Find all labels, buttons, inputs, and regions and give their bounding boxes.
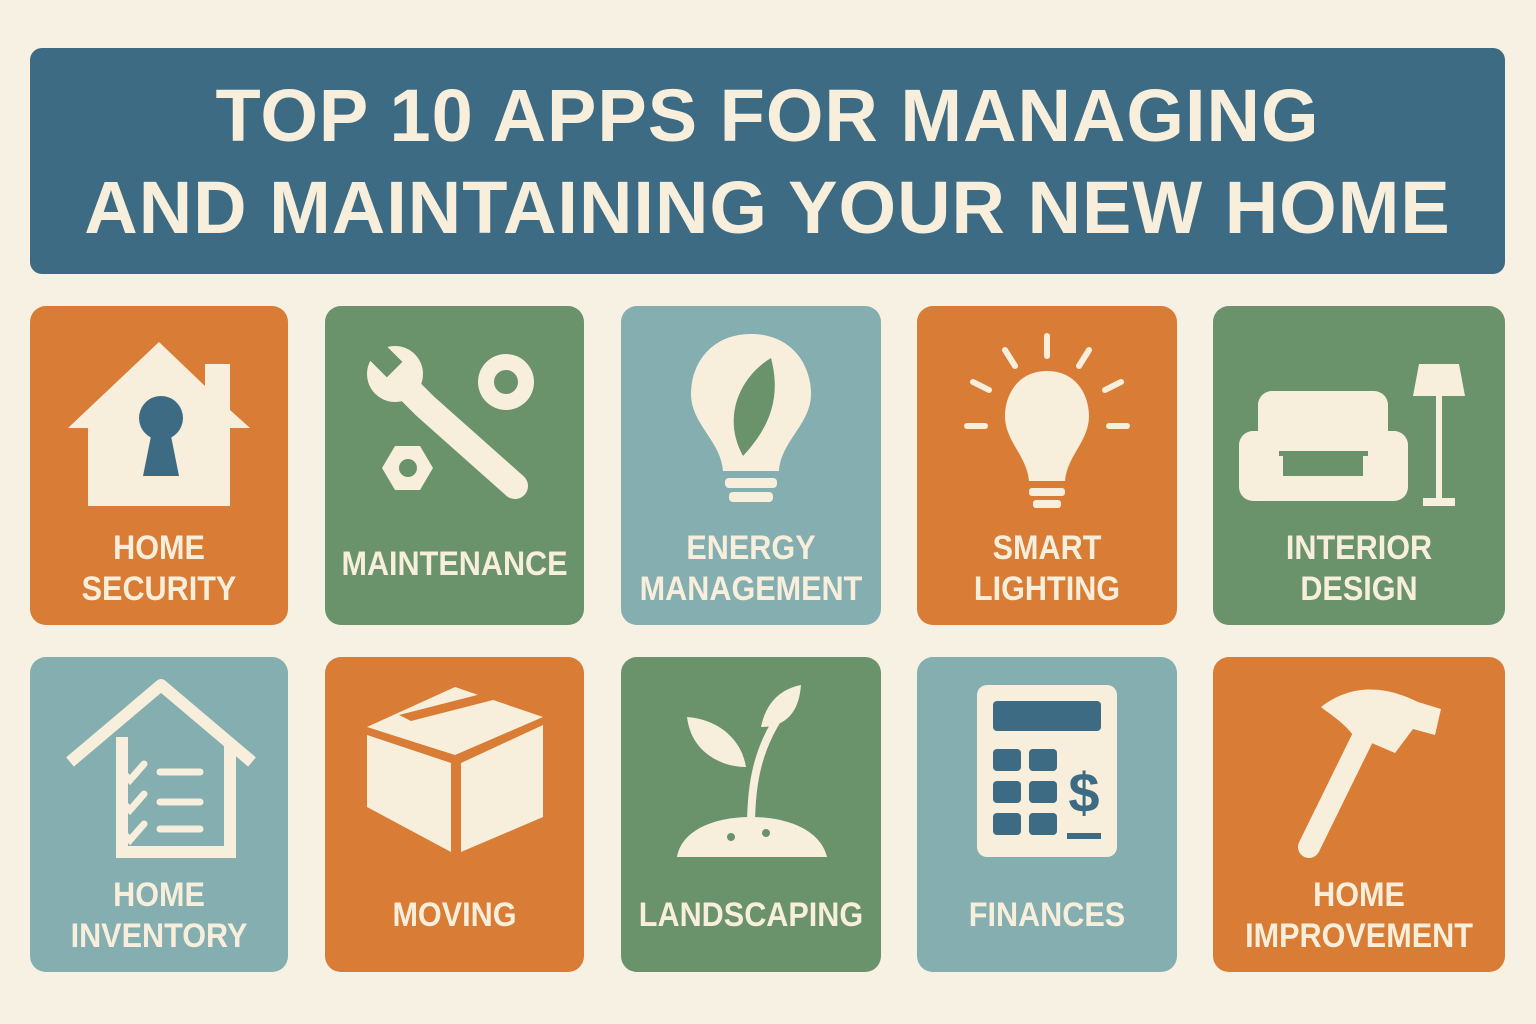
tile: smart lighting: LIGHTING: [974, 570, 1120, 608]
tile: home inventory: HOME: [113, 876, 205, 914]
tile: finances: [917, 657, 1177, 972]
icon: house with keyhole: [68, 342, 250, 506]
tile: home improvement: HOME: [1313, 876, 1405, 914]
title banner: AND MAINTAINING YOUR NEW HOME: [84, 166, 1451, 249]
tile: interior design: [1213, 306, 1505, 625]
tile: interior design: INTERIOR: [1286, 529, 1432, 567]
icon: hammer: [1298, 690, 1441, 858]
tile: home security: [30, 306, 288, 625]
tile: home security: SECURITY: [82, 570, 236, 608]
tile: finances: FINANCES: [969, 896, 1125, 934]
tile: moving: [325, 657, 584, 972]
tile: home inventory: [30, 657, 288, 972]
tile: home security: HOME: [113, 529, 205, 567]
icon: bulb with leaf: [691, 334, 811, 502]
title banner: TOP 10 APPS FOR MANAGING: [215, 74, 1320, 157]
tile: home improvement: IMPROVEMENT: [1245, 917, 1473, 955]
tile: moving: MOVING: [392, 896, 517, 934]
icon: sprout: [677, 685, 827, 857]
icon: calculator: $: [1068, 761, 1100, 824]
tile: energy management: ENERGY: [686, 529, 816, 567]
tile: energy management: [621, 306, 881, 625]
icon: light bulb with rays: [964, 333, 1130, 508]
title banner: [30, 48, 1505, 274]
tile: home inventory: INVENTORY: [71, 917, 247, 955]
tile: landscaping: LANDSCAPING: [639, 896, 863, 934]
icon: wrench and gears: [367, 346, 534, 499]
icon: sofa and lamp: [1239, 364, 1465, 506]
icon: house with checklist: [66, 679, 256, 858]
tile: smart lighting: [917, 306, 1177, 625]
icon: box: [367, 687, 543, 852]
tile: smart lighting: SMART: [993, 529, 1101, 567]
tile: home improvement: [1213, 657, 1505, 972]
tile: landscaping: [621, 657, 881, 972]
tile: interior design: DESIGN: [1300, 570, 1418, 608]
tile: maintenance: MAINTENANCE: [341, 545, 568, 583]
tile: energy management: MANAGEMENT: [640, 570, 862, 608]
tile: maintenance: [325, 306, 584, 625]
icon: calculator: [977, 685, 1117, 857]
